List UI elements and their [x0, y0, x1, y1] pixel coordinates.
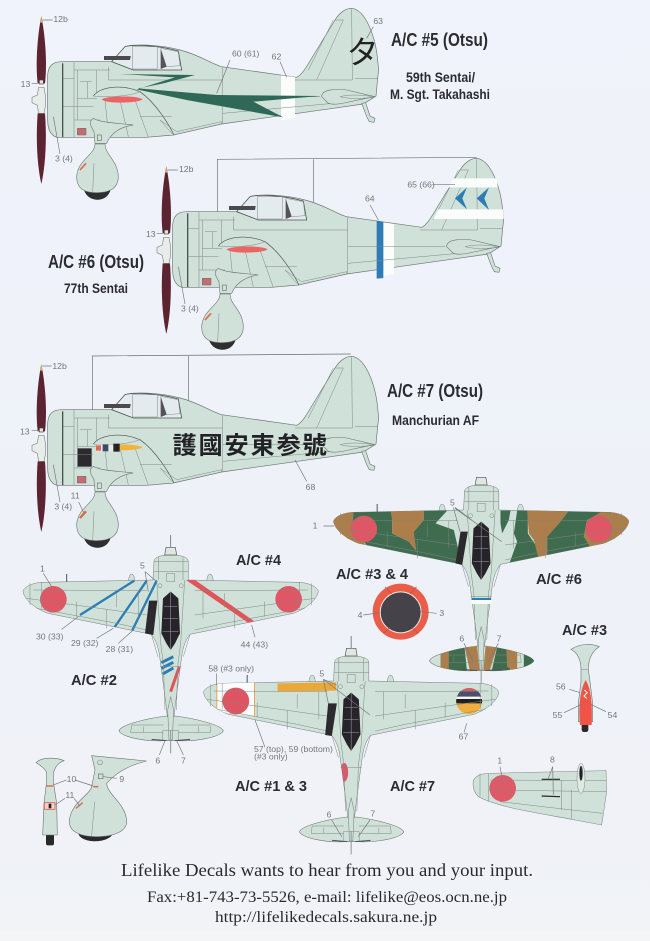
- callouts: A/C #7: 68: [306, 482, 315, 492]
- roundel: A/C #3 and 4: 3: [439, 608, 444, 618]
- marking: Manchurian roundel: [456, 688, 482, 714]
- callouts: top view #6: 7: [497, 634, 502, 644]
- detail: red wheel spat front view: [553, 644, 617, 732]
- callouts: A/C #5: 63: [373, 16, 383, 26]
- callouts: A/C #5: 12b: [53, 14, 68, 24]
- heading: A/C #6: A/C #6: [536, 571, 582, 588]
- heading: A/C #4: A/C #4: [236, 552, 282, 569]
- aircraft side view: A/C #6: [146, 157, 504, 350]
- marking: fuselage bands: [377, 221, 394, 279]
- caption: 59th Sentai: 59th Sentai/: [406, 70, 475, 85]
- callouts: A/C #5: 13: [21, 79, 30, 89]
- footer line 2: Fax:+81-743-73-5526, e-mail: lifelike@eos.ocn.ne.jp: [147, 889, 507, 906]
- landing gear: side view: [69, 756, 147, 841]
- heading: A/C #3: A/C #3: [562, 622, 607, 639]
- caption: Manchurian AF: Manchurian AF: [392, 413, 479, 428]
- marking: red hinomaru: [40, 586, 302, 613]
- callouts: top view #2 and #4: 30 (33): [36, 631, 64, 641]
- heading: A/C #1 and 3: A/C #1 & 3: [235, 778, 307, 795]
- marking: black wing walk: [455, 532, 468, 565]
- callouts: A/C #5: [21, 14, 383, 164]
- detail: red wheel spat front view: 54: [608, 710, 617, 720]
- callouts: top view #2 and #4: [36, 560, 268, 765]
- callouts: top view #2 and #4: 29 (32): [71, 638, 99, 648]
- detail: red wheel spat front view: 56: [556, 681, 566, 691]
- callouts: A/C #7: 3 (4): [54, 501, 72, 511]
- callouts: top view #6: 5: [450, 498, 455, 508]
- callouts: top view #6: 1: [313, 521, 318, 531]
- callouts: top view #1, #3 and #7: 58 (#3 only): [208, 663, 254, 673]
- marking: tail katakana: タ: [347, 34, 379, 70]
- heading: A/C #2: A/C #2: [71, 672, 117, 689]
- callouts: top view #1, #3 and #7: 7: [370, 809, 375, 819]
- callouts: A/C #6: 3 (4): [181, 304, 199, 314]
- marking: white wing panel and orange lines: [217, 682, 348, 782]
- callouts: top view #2 and #4: 28 (31): [106, 644, 133, 654]
- heading: A/C #6: A/C #6 (Otsu): [48, 252, 144, 272]
- roundel: A/C #3 and 4: [358, 584, 444, 640]
- aircraft side view: A/C #7: [20, 354, 379, 548]
- caption: 77th Sentai: 77th Sentai: [64, 281, 128, 296]
- callouts: top view #2 and #4: 7: [181, 755, 186, 765]
- landing gear: front view: [36, 758, 64, 845]
- marking: fuselage kanji: 護國安東参號: [173, 432, 327, 459]
- marking: tail bands and chevrons: [433, 178, 504, 219]
- camouflage pattern: [334, 510, 629, 563]
- callouts: A/C #6: 64: [365, 194, 375, 204]
- callouts: top view #2 and #4: 5: [140, 560, 145, 570]
- detail: red wheel spat front view: 55: [553, 710, 562, 720]
- detail: wing tip underside: 8: [550, 755, 555, 765]
- aircraft side view: A/C #5: [21, 8, 383, 200]
- marking: red wing stripe: [227, 246, 268, 253]
- caption: M. Sgt. Takahashi: M. Sgt. Takahashi: [390, 87, 490, 102]
- marking: black fuselage panel: [78, 448, 92, 467]
- marking: red hinomaru: [222, 688, 249, 714]
- marking: black wing walk: [325, 703, 337, 736]
- marking: green lightning bolt: [120, 74, 320, 117]
- callouts: A/C #5: 62: [272, 51, 281, 61]
- marking: red hinomaru: [350, 516, 612, 542]
- callouts: top view #1, #3 and #7: 67: [459, 731, 468, 741]
- detail: wing tip underside: [473, 755, 607, 825]
- callouts: top view #6: [313, 498, 502, 662]
- callouts: top view #1, #3 and #7: 6: [327, 809, 332, 819]
- heading: A/C #7: A/C #7: [390, 778, 435, 795]
- marking: blue fuselage band: [471, 598, 491, 600]
- footer line 1: Lifelike Decals wants to hear from you and your input.: [121, 860, 533, 880]
- marking: blue wing stripes: [80, 580, 257, 692]
- marking: wing flag stripes: [96, 444, 143, 452]
- footer line 3: http://lifelikedecals.sakura.ne.jp: [215, 909, 437, 926]
- callouts: top view #1, #3 and #7: 57 (top), 59 (bottom): [254, 744, 333, 754]
- detail: wing tip underside: 1: [497, 755, 502, 765]
- callouts: A/C #6: 13: [146, 229, 156, 239]
- roundel: A/C #3 and 4: 4: [358, 610, 363, 620]
- detail: landing gear front and side views: 11: [65, 790, 75, 800]
- callouts: top view #2 and #4: 44 (43): [241, 640, 268, 650]
- heading: A/C #7: A/C #7 (Otsu): [387, 381, 483, 401]
- top view: A/C #2 and #4: [23, 535, 318, 765]
- callouts: A/C #6: 65 (66): [407, 179, 435, 189]
- detail: landing gear front and side views: 9: [119, 774, 124, 784]
- callouts: A/C #7: 13: [20, 426, 30, 436]
- footer: contact text: [121, 860, 533, 926]
- antenna wire: [92, 354, 351, 410]
- callouts: A/C #5: 3 (4): [55, 154, 73, 164]
- callouts: A/C #5: 60 (61): [232, 48, 260, 58]
- callouts: A/C #6: 12b: [179, 164, 194, 174]
- detail: landing gear front and side views: 10: [67, 774, 76, 784]
- callouts: A/C #6: [146, 164, 455, 314]
- callouts: top view #1, #3 and #7: 5: [319, 668, 324, 678]
- antenna wire: [217, 157, 477, 212]
- heading: A/C #3 and 4: A/C #3 & 4: [336, 566, 409, 583]
- top view: A/C #6 camouflage: [327, 477, 637, 683]
- marking: white fuselage band: [281, 75, 295, 121]
- detail: landing gear front and side views: [36, 756, 147, 845]
- callouts: top view #2 and #4: 1: [40, 563, 45, 573]
- callouts: A/C #7: 12b: [52, 361, 67, 371]
- callouts: top view #1, #3 and #7: (#3 only): [254, 752, 288, 762]
- heading: A/C #5: A/C #5 (Otsu): [391, 30, 488, 50]
- callouts: A/C #7: [20, 361, 315, 513]
- callouts: top view #2 and #4: 6: [155, 755, 160, 765]
- callouts: A/C #7: 11: [71, 490, 80, 500]
- callouts: top view #1, #3 and #7: [208, 663, 468, 837]
- top view: A/C #1, #3 and #7: [203, 636, 499, 854]
- camouflage: tailplane: [440, 647, 535, 673]
- marking: black wing walk: [145, 601, 157, 635]
- marking: red wing stripe: [102, 96, 143, 103]
- callouts: top view #6: 6: [459, 634, 464, 644]
